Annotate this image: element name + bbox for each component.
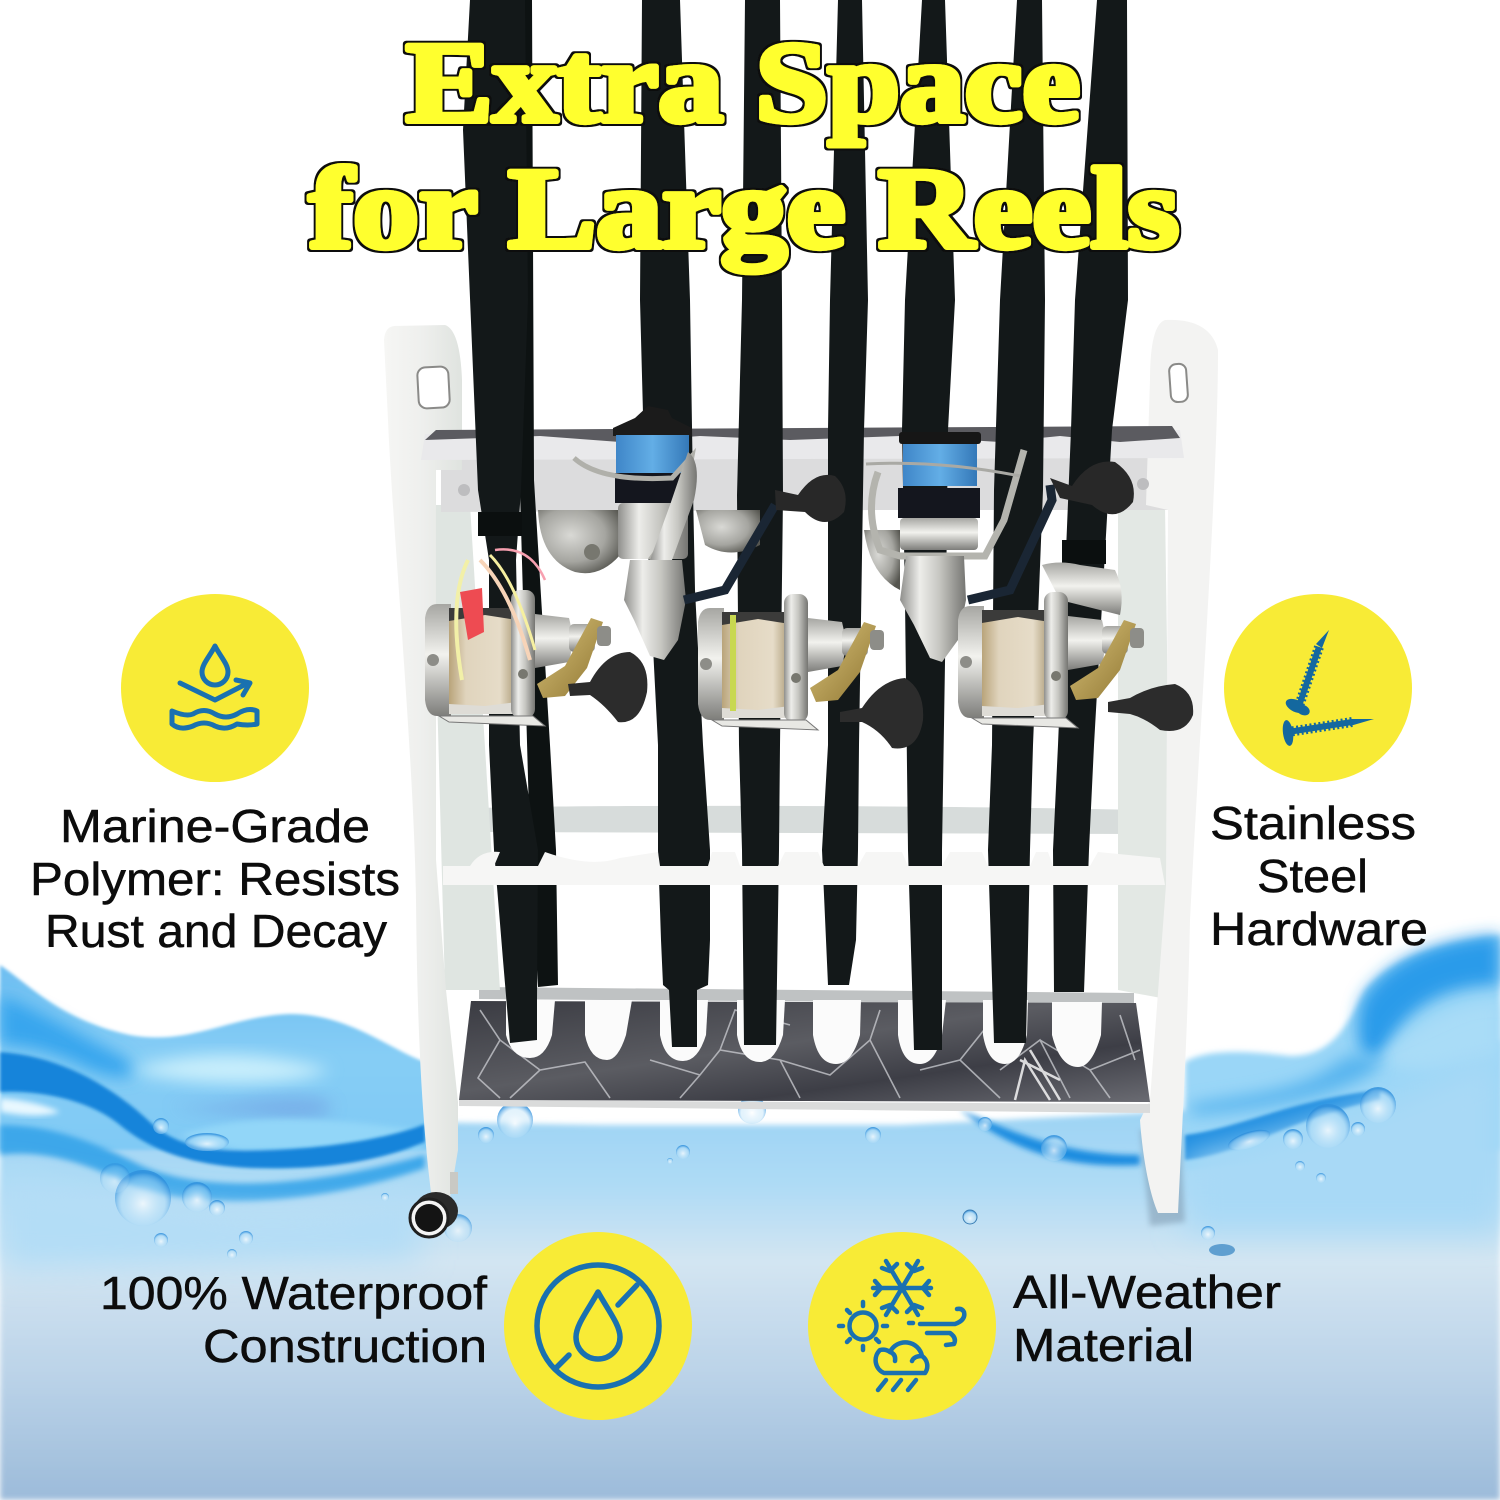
icon: water drop and waves [121,594,309,782]
shelf pattern [478,1010,1140,1100]
right blue crest [1358,935,1500,1058]
left highlight [130,1055,330,1083]
label: all-weather: Material [1013,1319,1194,1371]
upper back board [441,458,1168,512]
rod 4 [822,0,868,985]
bail [866,463,1020,476]
rear reel [1042,562,1122,615]
conventional reel right [958,562,1193,731]
rod 1 [463,0,538,1043]
label: marine-grade: Polymer: Resists [30,853,400,905]
feature: waterproof [100,1232,692,1420]
rod slots [506,1000,1102,1067]
label: stainless: Stainless [1210,797,1416,849]
left upright [384,325,462,1200]
handle right [1169,363,1188,403]
bail [574,456,692,560]
front rail with notches [443,852,1165,885]
spinning reel left [538,406,846,660]
right crest light [1380,1000,1500,1070]
icon: weather [808,1232,996,1420]
title line 2: for Large Reels [309,145,1179,272]
black base [615,473,690,503]
rod 7 [1053,0,1128,992]
right inner shading [1118,505,1172,1000]
rod 2 [640,0,710,1047]
reel foot [900,556,966,662]
right upright [1140,320,1218,1213]
back ledge at bottom [479,987,1134,1004]
front lip [459,1100,1150,1113]
left inner shading [432,505,500,990]
left light lower [180,1119,420,1150]
fishing rods [463,0,1128,1050]
title [309,19,1179,272]
left saturated stripe [0,995,134,1077]
spool cap [899,432,981,444]
center band under shelf [960,1110,1140,1166]
top shelf [421,430,1184,460]
label: waterproof: 100% Waterproof [100,1267,487,1319]
knob [840,678,923,748]
silver body [618,503,688,559]
rack shadow [1140,1130,1185,1226]
crank knob [775,475,846,522]
reel clamp [478,512,522,536]
left shadow swirl [170,1096,332,1120]
rod 6 [988,0,1045,1043]
lure [460,588,484,640]
left white gleam [0,1098,60,1115]
board bolt right [1137,478,1149,490]
crank knob [1050,462,1134,514]
left upper dark band [0,1052,425,1168]
conventional reel center [698,594,923,748]
label: marine-grade: Marine-Grade [60,800,370,852]
label: stainless [1210,797,1428,955]
rear rail [477,806,1135,834]
reel bolt [584,544,600,560]
frame [871,450,1024,556]
label: waterproof: Construction [203,1320,487,1372]
crank arm [684,505,775,600]
bottom shelf [459,1001,1150,1102]
reel dome [864,530,900,590]
label: stainless: Hardware [1210,903,1428,955]
handle left [417,366,450,409]
right band [1185,1090,1380,1160]
label: marine-grade [30,800,400,957]
left lower band [0,1125,425,1201]
black base [898,488,980,518]
label: stainless: Steel [1257,850,1368,902]
label: all-weather: All-Weather [1013,1266,1281,1318]
feature: stainless steel [1210,594,1428,955]
reel dome right [696,510,760,552]
label: waterproof [100,1267,487,1372]
fishing rod rack [384,320,1218,1237]
right pale wave [1185,935,1500,1170]
soft fade right [1185,1050,1500,1230]
rod 1 rear [508,0,558,987]
knob [568,652,647,722]
spinning reel right [864,432,1134,662]
icon: screws [1224,594,1412,782]
icon: no water drop [504,1232,692,1420]
spool [616,435,689,473]
soft fade left [0,1175,420,1270]
rod 3 [737,0,783,1045]
rod 5 [902,0,955,1050]
label: all-weather [1013,1266,1281,1371]
spool [903,444,977,486]
green line [730,615,736,711]
sea body [0,1040,1500,1500]
board bolt left [458,484,470,496]
caster wheel [410,1172,458,1237]
lure skirt [456,549,545,680]
left pale wave [0,965,430,1150]
rotor arm [650,452,697,560]
reel dome left [538,510,620,573]
spool cap [613,406,692,436]
knob [1108,684,1193,731]
silver body [900,518,978,550]
right blue streak [1190,1055,1380,1115]
feature: all-weather [808,1232,1281,1420]
crank arm [968,485,1052,600]
bubbles [100,1087,1396,1259]
reel foot [624,560,686,660]
conventional reel left [425,549,647,726]
water waves background [0,935,1500,1500]
label: marine-grade: Rust and Decay [45,905,387,957]
top shelf dark surface [425,426,1180,442]
title line 1: Extra Space [406,19,1080,146]
feature: marine-grade polymer [30,594,400,957]
reel clamp 2 [1062,540,1106,564]
